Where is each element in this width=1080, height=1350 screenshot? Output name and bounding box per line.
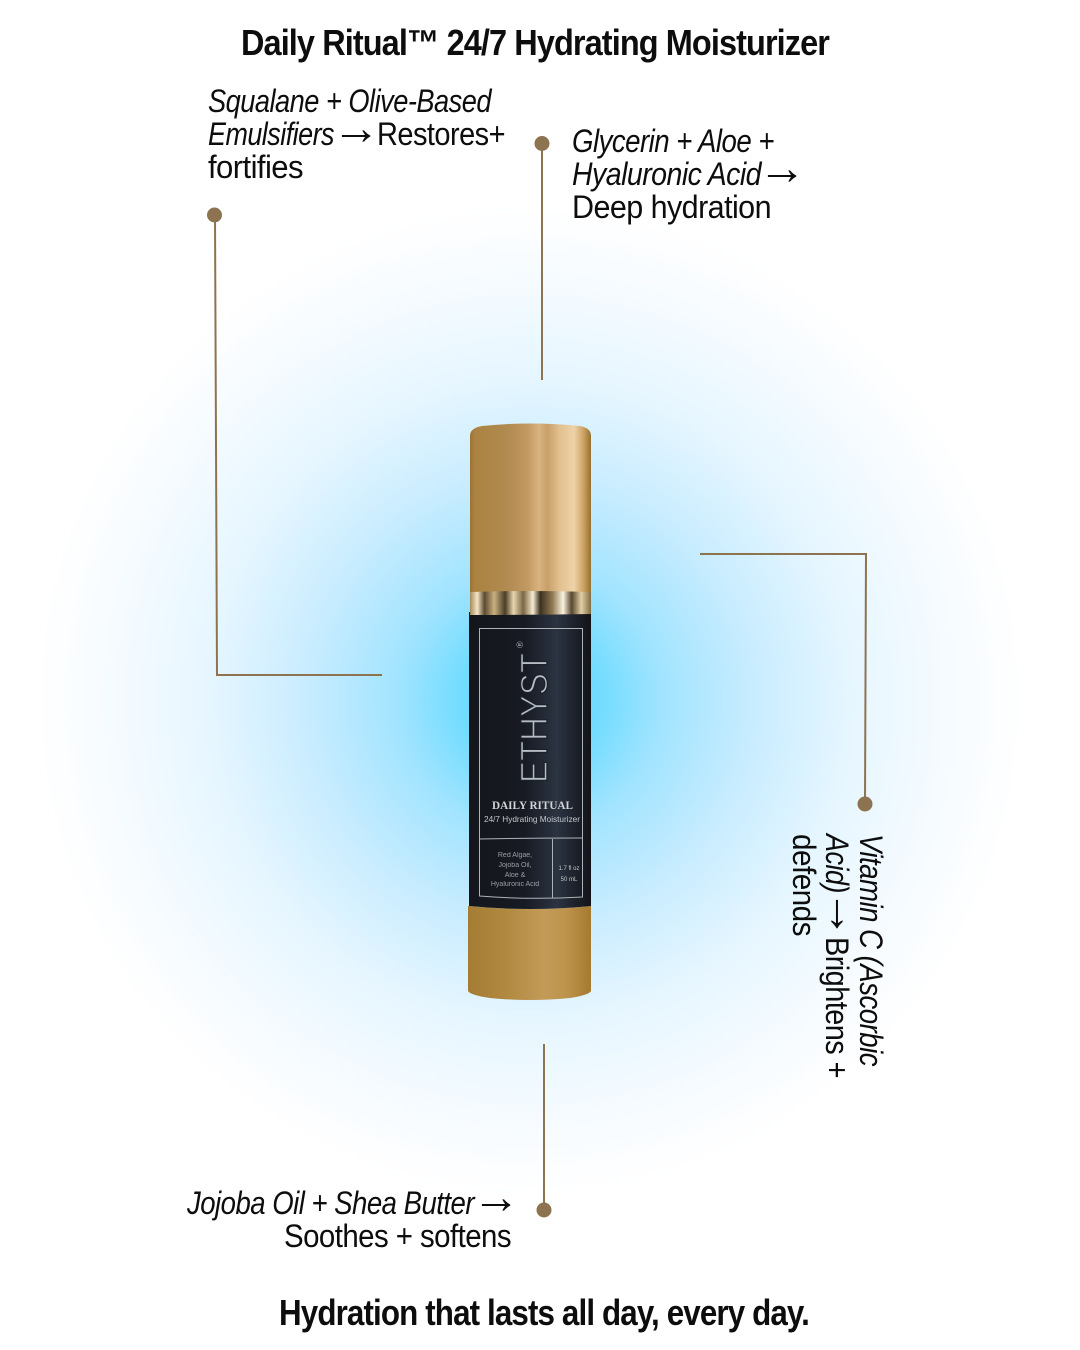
ingredient list: Jojoba Oil, [498, 862, 532, 869]
bottle gold base [468, 906, 591, 1000]
ingredient list [491, 852, 539, 888]
callout: glycerin, aloe and hyaluronic acid: Glycerin + Aloe + [572, 123, 774, 159]
callout: jojoba oil and shea butter: Jojoba Oil + Shea Butter [186, 1185, 476, 1221]
background: blue radial glow [0, 190, 1080, 1210]
volume [558, 866, 580, 883]
product name: DAILY RITUAL [492, 798, 573, 812]
pointer: vitamin C connector [700, 553, 872, 812]
bottle metallic collar [470, 591, 591, 615]
callout: squalane and olive-based emulsifiers: Restores+ [377, 116, 505, 152]
callout: squalane and olive-based emulsifiers: fortifies [208, 149, 303, 185]
pointer: squalane connector [207, 208, 382, 675]
callout: squalane and olive-based emulsifiers [208, 83, 505, 185]
volume: 50 mL [561, 877, 578, 883]
callout: jojoba oil and shea butter [186, 1171, 520, 1254]
pointer: jojoba connector [536, 1044, 552, 1218]
ingredient list: Hyaluronic Acid [491, 881, 539, 888]
callout: vitamin C, rotated text: Vitamin C (Ascorbic [853, 834, 889, 1067]
pointer: glycerin connector [534, 136, 550, 380]
label frame lines [480, 628, 582, 898]
callout: glycerin, aloe and hyaluronic acid: → [758, 142, 806, 195]
callout: vitamin C, rotated text: Brightens + [819, 937, 855, 1078]
callout: jojoba oil and shea butter: → [472, 1171, 520, 1224]
bottle gold cap [470, 424, 591, 592]
title: Daily Ritual™ 24/7 Hydrating Moisturizer [241, 22, 830, 63]
callout: glycerin, aloe and hyaluronic acid [572, 123, 806, 225]
registered mark: ® [515, 641, 525, 648]
callout: squalane and olive-based emulsifiers: Squalane + Olive-Based [208, 83, 493, 119]
ingredient list: Aloe & [505, 872, 526, 879]
callout: squalane and olive-based emulsifiers: → [332, 102, 380, 155]
callout: vitamin C, rotated text: Acid) [819, 832, 855, 893]
ingredient list: Red Algae, [498, 852, 532, 859]
callout: jojoba oil and shea butter: Soothes + softens [284, 1218, 511, 1254]
product bottle [468, 424, 591, 1000]
closing tagline: Hydration that lasts all day, every day. [279, 1292, 809, 1333]
callout: squalane and olive-based emulsifiers: Emulsifiers [208, 116, 334, 152]
callout: vitamin C, rotated text: defends [786, 834, 822, 936]
callout: vitamin C, rotated text: → [818, 890, 871, 938]
callout: glycerin, aloe and hyaluronic acid: Hyaluronic Acid [572, 156, 763, 192]
bottle navy label [469, 612, 591, 909]
product subtitle: 24/7 Hydrating Moisturizer [484, 814, 580, 824]
callout: glycerin, aloe and hyaluronic acid: Deep hydration [572, 189, 771, 225]
brand name ETHYST: ETHYST [514, 653, 556, 783]
callout: vitamin C, rotated text [786, 832, 889, 1078]
volume: 1.7 fl oz [558, 866, 580, 872]
